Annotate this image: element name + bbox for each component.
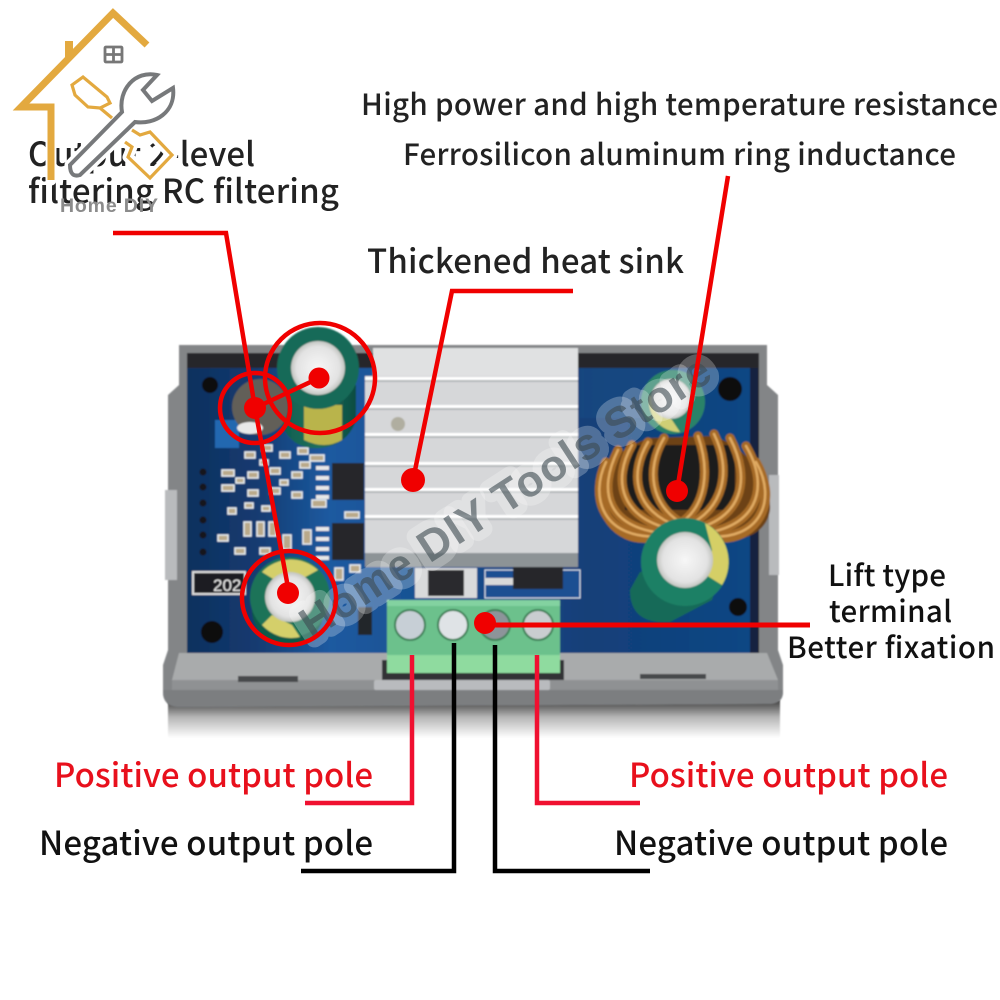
watermark: Home DIY Tools Store [291, 346, 720, 648]
logo: house [21, 13, 147, 180]
wire: left positive [305, 655, 412, 803]
terminal block [374, 600, 564, 690]
wire: right negative [495, 645, 650, 871]
title: inductance: Ferrosilicon aluminum ring inductance [403, 132, 956, 174]
title: output filtering: Output 2-level [28, 128, 255, 176]
resistor 202 [193, 572, 245, 594]
label: left negative: Negative output pole [39, 817, 373, 865]
callout: terminal [474, 612, 810, 634]
callout: heat sink [401, 291, 573, 492]
callout: inductor [666, 176, 728, 502]
title: inductance: High power and high temperature resistance [361, 82, 998, 124]
logo: chimney [65, 41, 73, 58]
watermark: Home DIY Tools Store [291, 346, 720, 648]
inductor [598, 434, 770, 540]
diode [358, 607, 372, 635]
module photo [163, 327, 783, 738]
logo: screwdriver [72, 77, 172, 178]
case [163, 327, 783, 707]
logo: caption: Home DIY [60, 195, 158, 217]
lower components [415, 568, 477, 598]
title: inductance [361, 82, 998, 174]
logo [21, 13, 173, 217]
title: terminal: Lift type [828, 553, 946, 595]
logo: white halo [21, 13, 173, 180]
title: terminal: Better fixation [787, 625, 995, 667]
title: terminal: terminal [829, 589, 952, 631]
header pins [200, 468, 206, 556]
heat sink [365, 348, 578, 567]
capacitor: bottom [250, 557, 330, 646]
label: right negative: Negative output pole [614, 817, 948, 865]
smd components [218, 445, 360, 580]
chips [332, 463, 364, 500]
callout lines: filtering [113, 233, 375, 645]
label: left positive: Positive output pole [54, 749, 373, 797]
wire: left negative [301, 643, 454, 871]
label: right positive: Positive output pole [629, 749, 948, 797]
capacitor: top [277, 327, 359, 448]
capacitor: small [232, 379, 288, 435]
title: output filtering: filtering RC filtering [28, 165, 339, 213]
logo: window [105, 47, 122, 62]
title: output filtering [28, 128, 339, 213]
wire: right positive [537, 655, 640, 803]
mounting holes [201, 377, 747, 643]
logo: wrench [70, 74, 173, 176]
pcb [187, 353, 759, 653]
title: terminal [787, 553, 995, 667]
title: heat sink: Thickened heat sink [367, 235, 684, 283]
capacitor: right bottom [630, 518, 729, 622]
ground shadow [168, 700, 780, 738]
case: 202 [213, 576, 241, 595]
capacitor: right top [641, 370, 705, 434]
